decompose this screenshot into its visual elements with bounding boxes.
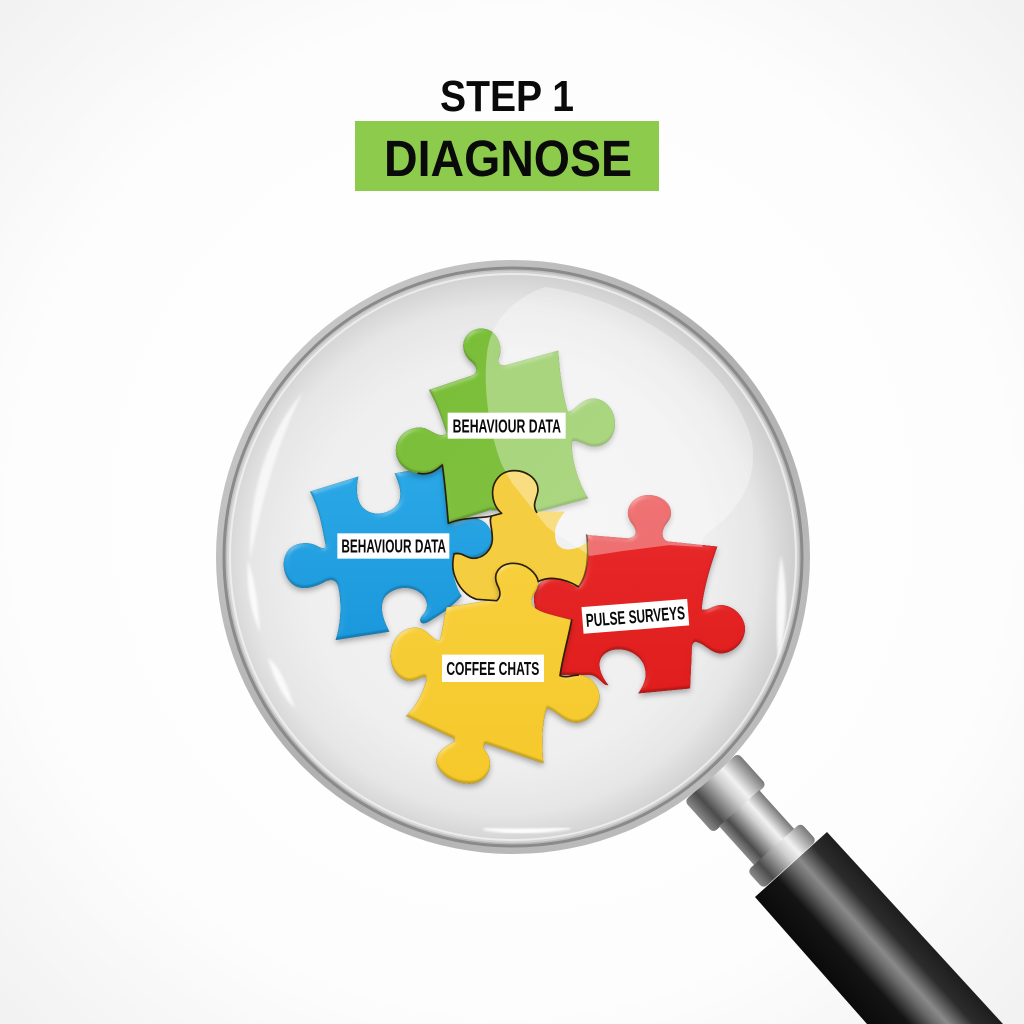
- lens: rim inner dark line: [224, 268, 802, 846]
- puzzle piece: red: [534, 495, 745, 693]
- handle: metal collars and neck: [684, 753, 817, 889]
- handle: black grip: [755, 832, 1003, 1024]
- lens: large upper-right reflection: [486, 287, 753, 556]
- label: pulse surveys: PULSE SURVEYS: [585, 602, 686, 631]
- lens: bottom glare: [484, 828, 570, 833]
- label: behaviour data (green): BEHAVIOUR DATA: [453, 416, 561, 437]
- lens: bottom-left glare: [268, 658, 295, 708]
- label: behaviour data (blue): [337, 533, 449, 559]
- lens: metal rim: [216, 260, 810, 854]
- puzzle piece: green: [396, 329, 615, 523]
- label: behaviour data (green): [448, 413, 566, 439]
- puzzle piece: centre yellow: [453, 471, 589, 603]
- puzzle piece: front yellow: [391, 563, 599, 784]
- heading: step 1: STEP 1: [440, 72, 574, 121]
- lens: lower-left glare: [248, 560, 260, 632]
- lens: glass: [227, 271, 799, 843]
- label: behaviour data (blue): BEHAVIOUR DATA: [341, 535, 446, 556]
- label: coffee chats: [442, 655, 544, 682]
- piece seams: [418, 465, 588, 677]
- magnifying glass handle: [684, 753, 1003, 1024]
- puzzle seams and labels: [337, 413, 689, 682]
- puzzle piece: blue: [284, 465, 492, 640]
- lens: right glare: [777, 555, 786, 660]
- lens: left glare: [250, 392, 303, 560]
- lens: bright rim ring: [230, 274, 796, 840]
- label: coffee chats: COFFEE CHATS: [446, 658, 539, 679]
- label: pulse surveys: [581, 599, 689, 634]
- jigsaw puzzle pieces: [284, 329, 745, 784]
- magnifying glass lens: [216, 260, 810, 854]
- heading: diagnose banner: DIAGNOSE: [384, 130, 632, 187]
